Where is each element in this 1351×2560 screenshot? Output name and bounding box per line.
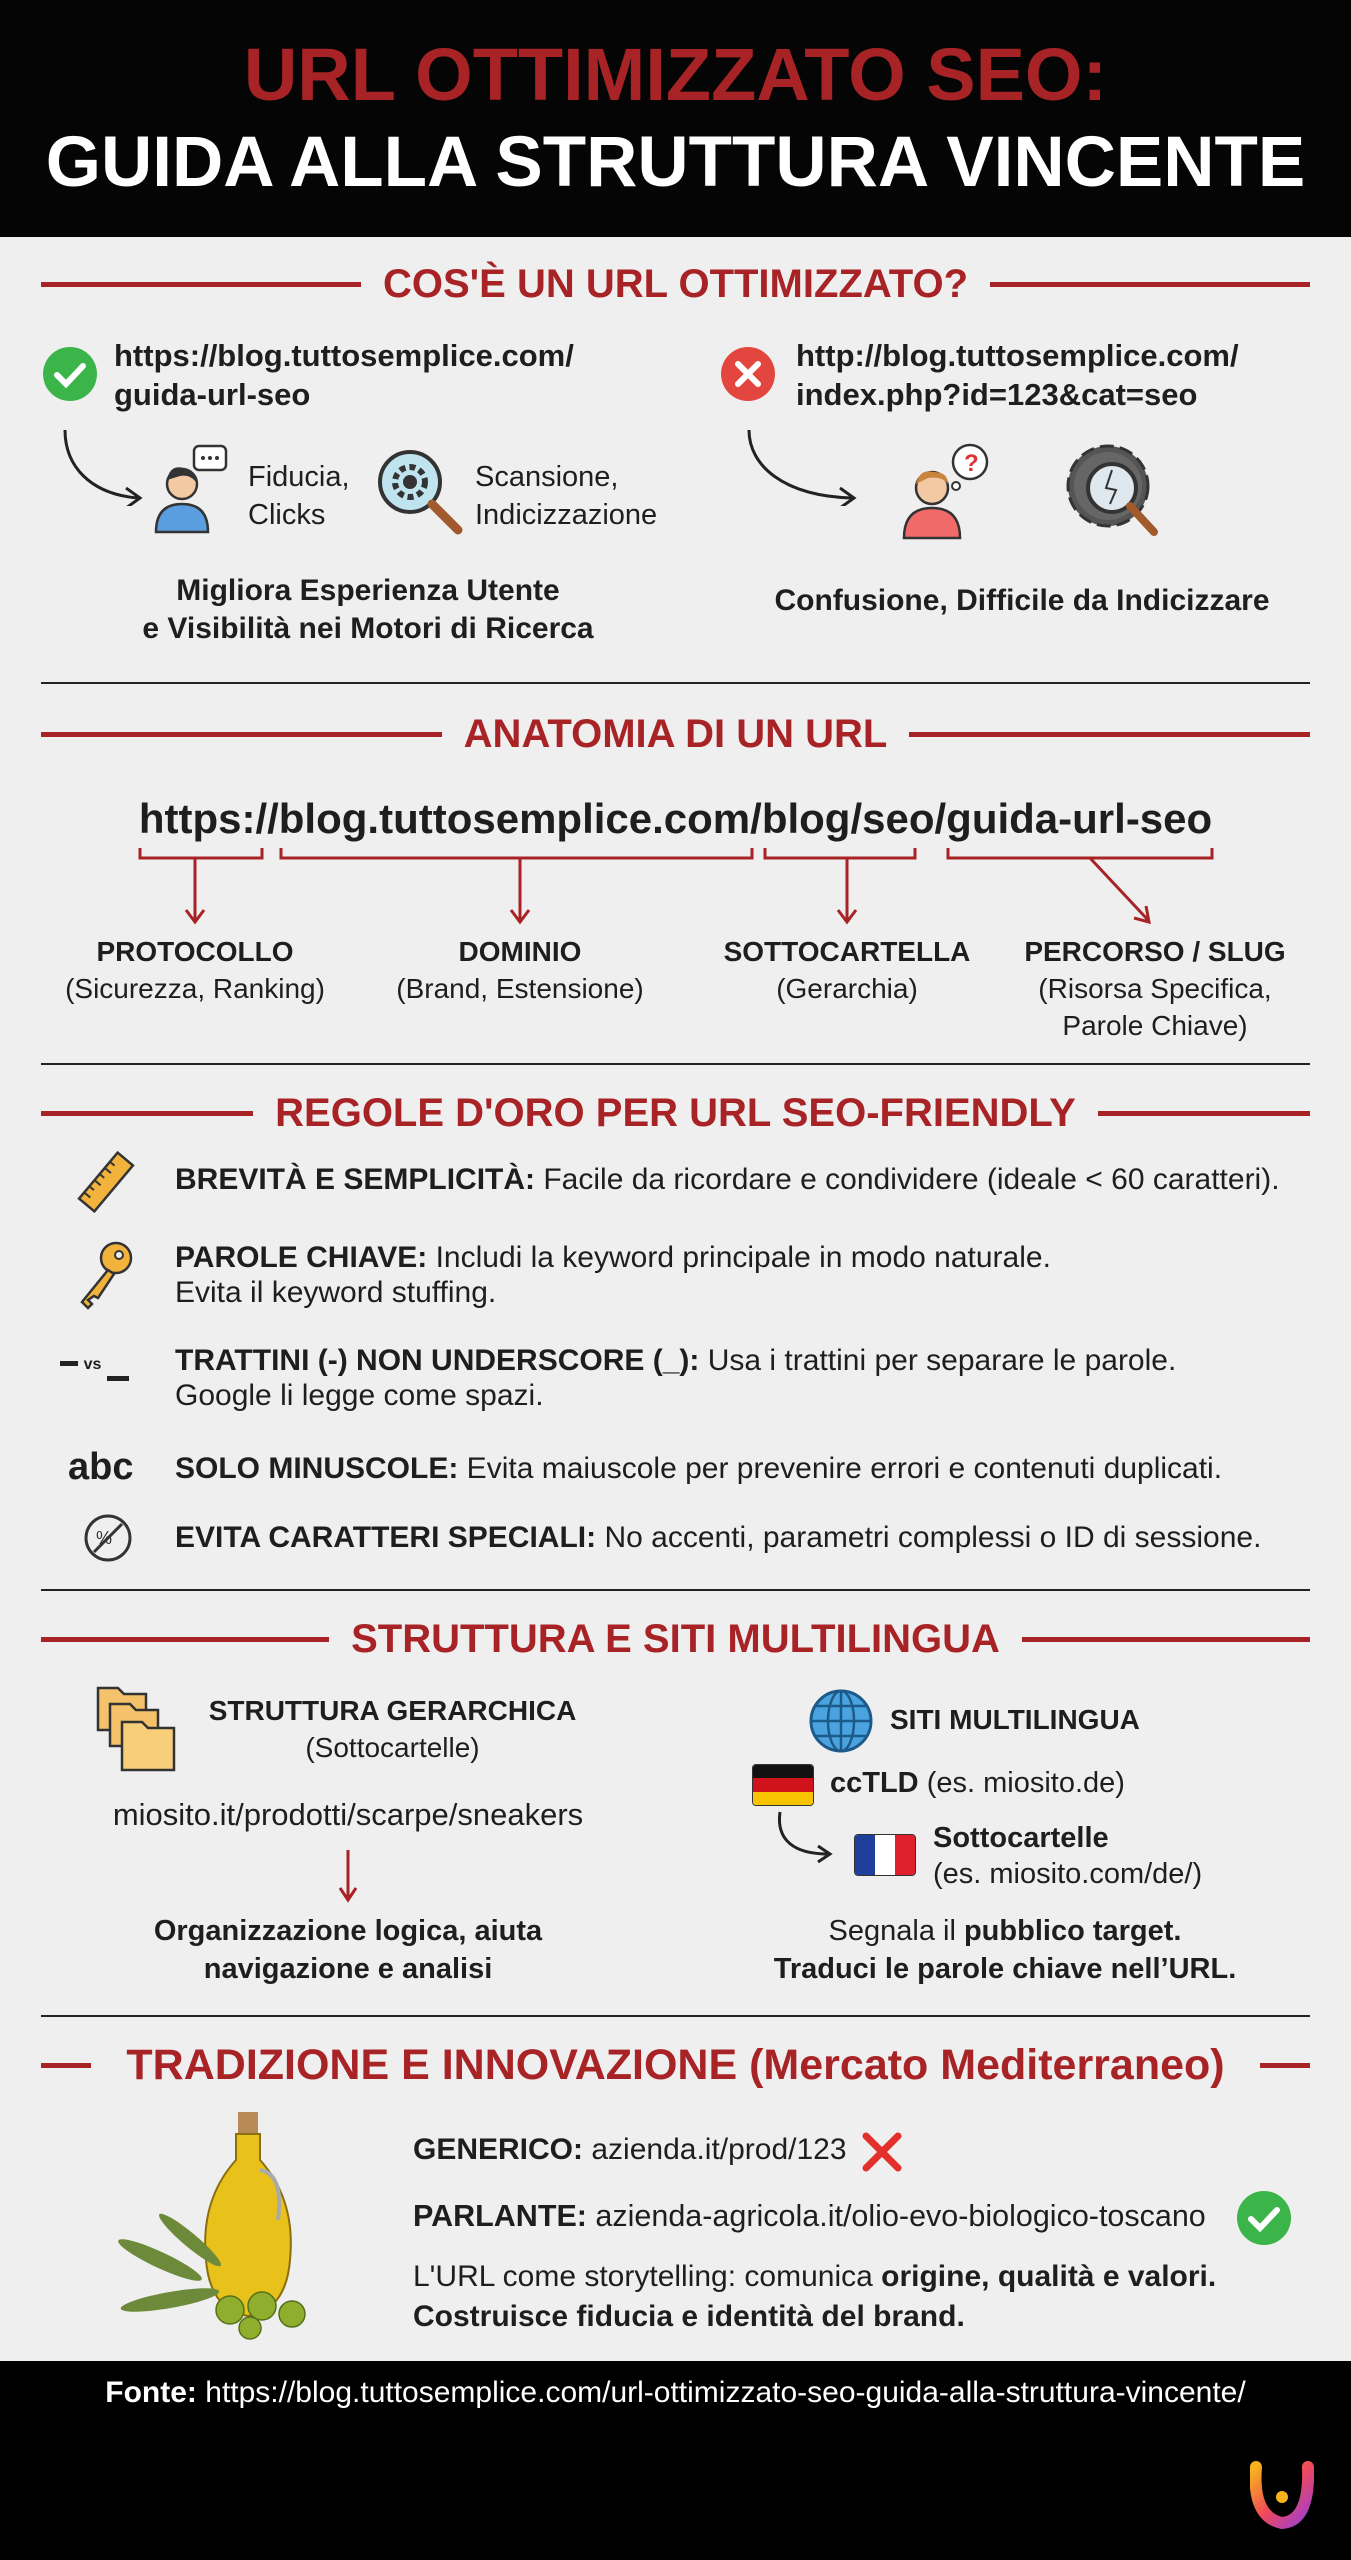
rule: trattini: TRATTINI (-) NON UNDERSCORE (_): Usa i trattini per separare le parole. — [175, 1344, 1176, 1377]
text: sottocartelle: Sottocartelle — [933, 1822, 1109, 1854]
label: sottocartella: (Gerarchia) — [776, 973, 918, 1004]
panel: siti multilingua — [752, 1690, 1236, 1985]
title line 2: GUIDA ALLA STRUTTURA VINCENTE — [46, 123, 1305, 202]
caption good: e Visibilità nei Motori di Ricerca — [142, 612, 594, 645]
label: sottocartella: SOTTOCARTELLA — [724, 936, 970, 967]
rule: parole chiave: Evita il keyword stuffing. — [175, 1276, 496, 1309]
icon: confused user: ? — [964, 450, 979, 477]
rule: brevita: BREVITÀ E SEMPLICITÀ: Facile da ricordare e condividere (ideale < 60 caratteri). — [175, 1163, 1280, 1196]
footer — [0, 2361, 1351, 2560]
text: struttura gerarchica: (Sottocartelle) — [305, 1732, 480, 1763]
icon: no special chars — [84, 1514, 132, 1562]
source text: Fonte: https://blog.tuttosemplice.com/url-ottimizzato-seo-guida-alla-struttura-vincente/ — [105, 2376, 1246, 2409]
arrow curve — [64, 430, 142, 506]
heading: cos'è un url ottimizzato: COS'È UN URL OTTIMIZZATO? — [383, 262, 968, 306]
bad url text — [796, 338, 1239, 412]
arrow curve — [748, 430, 856, 506]
flag: germany — [752, 1764, 814, 1806]
anatomy url: https://blog.tuttosemplice.com/blog/seo/guida-url-seo — [139, 795, 1212, 842]
rule: parole chiave — [175, 1241, 1051, 1309]
panel: struttura gerarchica — [96, 1686, 583, 1985]
caption: navigazione e analisi — [204, 1953, 492, 1985]
caption: Organizzazione logica, aiuta — [154, 1915, 542, 1947]
example url: miosito.it/prodotti/scarpe/sneakers — [113, 1797, 583, 1832]
bad url text: http://blog.tuttosemplice.com/ — [796, 338, 1239, 373]
icon: dash vs underscore: vs — [84, 1356, 101, 1373]
text: fiducia clicks — [248, 461, 350, 531]
heading: struttura multilingua: STRUTTURA E SITI MULTILINGUA — [351, 1616, 1000, 1660]
bad url text: index.php?id=123&cat=seo — [796, 377, 1197, 412]
text: siti multilingua: SITI MULTILINGUA — [890, 1704, 1140, 1735]
icon: red x — [721, 347, 775, 401]
icon: dash vs underscore — [60, 1356, 129, 1381]
text: struttura gerarchica: STRUTTURA GERARCHICA — [209, 1695, 576, 1726]
heading: regole d'oro — [41, 1090, 1310, 1134]
icon: folders — [96, 1686, 176, 1772]
label: sottocartella — [724, 936, 970, 1004]
heading: anatomia: ANATOMIA DI UN URL — [464, 712, 887, 756]
label: slug: (Risorsa Specifica, — [1038, 973, 1272, 1004]
text: storytelling: Costruisce fiducia e identità del brand. — [413, 2300, 965, 2333]
icon: abc: abc — [68, 1446, 133, 1488]
good url text: guida-url-seo — [114, 377, 310, 412]
icon: user with bubble — [154, 444, 228, 534]
heading: anatomia — [41, 712, 1310, 756]
arrow down — [338, 1850, 358, 1903]
icon: ruler — [77, 1150, 135, 1213]
label: slug — [1024, 936, 1286, 1041]
icon: red x mark — [860, 2130, 904, 2174]
rule: parole chiave: PAROLE CHIAVE: Includi la keyword principale in modo naturale. — [175, 1241, 1051, 1274]
text: fiducia clicks: Clicks — [248, 499, 325, 531]
label: slug: PERCORSO / SLUG — [1024, 936, 1286, 967]
icon: olive oil bottle — [100, 2110, 360, 2340]
icon: globe — [808, 1688, 874, 1754]
label: protocollo: PROTOCOLLO — [96, 936, 294, 967]
label: protocollo — [65, 936, 325, 1004]
icon: no special chars: % — [96, 1528, 112, 1548]
arrow curve — [774, 1810, 838, 1866]
panel: bad url — [721, 338, 1270, 617]
label: dominio: DOMINIO — [459, 936, 581, 967]
caption bad: Confusione, Difficile da Indicizzare — [774, 584, 1270, 617]
text: generico: GENERICO: azienda.it/prod/123 — [413, 2133, 847, 2166]
rule: trattini: Google li legge come spazi. — [175, 1379, 544, 1412]
text: storytelling: L'URL come storytelling: comunica origine, qualità e valori. — [413, 2260, 1216, 2293]
brackets and arrows — [138, 848, 1214, 924]
caption good: Migliora Esperienza Utente — [176, 574, 560, 607]
caption: Traduci le parole chiave nell’URL. — [774, 1953, 1236, 1985]
good url text: https://blog.tuttosemplice.com/ — [114, 338, 574, 373]
rule: caratteri speciali: EVITA CARATTERI SPECIALI: No accenti, parametri complessi o ID di sessione. — [175, 1521, 1261, 1554]
icon: logo — [1250, 2461, 1314, 2529]
title line 1: URL OTTIMIZZATO SEO: — [244, 33, 1107, 116]
rule: minuscole: SOLO MINUSCOLE: Evita maiuscole per prevenire errori e contenuti duplicati. — [175, 1452, 1222, 1485]
icon: green check — [43, 347, 97, 401]
good url text — [114, 338, 574, 412]
label: dominio: (Brand, Estensione) — [396, 973, 644, 1004]
text: scansione — [475, 461, 657, 531]
caption: Segnala il pubblico target. — [829, 1915, 1181, 1947]
text: storytelling — [413, 2257, 1216, 2337]
heading: regole d'oro: REGOLE D'ORO PER URL SEO-FRIENDLY — [275, 1090, 1076, 1134]
url anatomy diagram — [65, 795, 1286, 1041]
caption good — [142, 574, 594, 645]
label: slug: Parole Chiave) — [1062, 1010, 1248, 1041]
caption — [154, 1915, 542, 1985]
text: sottocartelle: (es. miosito.com/de/) — [933, 1858, 1202, 1890]
icon: confused user — [902, 444, 988, 540]
icon: key — [80, 1242, 132, 1310]
flag: france — [854, 1834, 916, 1876]
heading: cos'è un url ottimizzato — [41, 262, 1310, 306]
text: struttura gerarchica — [209, 1695, 576, 1763]
header banner — [0, 0, 1351, 237]
rule: trattini — [175, 1344, 1176, 1412]
heading: tradizione e innovazione: TRADIZIONE E INNOVAZIONE (Mercato Mediterraneo) — [126, 2040, 1225, 2088]
icon: green check — [1236, 2190, 1292, 2246]
text: cctld: ccTLD (es. miosito.de) — [830, 1767, 1125, 1799]
text: scansione: Indicizzazione — [475, 499, 657, 531]
heading: struttura multilingua — [41, 1616, 1310, 1660]
text: parlante: PARLANTE: azienda-agricola.it/olio-evo-biologico-toscano — [413, 2199, 1206, 2233]
panel: good url — [43, 338, 657, 645]
icon: magnifier gear — [378, 450, 462, 534]
caption — [720, 1912, 1290, 1988]
label: protocollo: (Sicurezza, Ranking) — [65, 973, 325, 1004]
text: scansione: Scansione, — [475, 461, 618, 493]
label: dominio — [396, 936, 644, 1004]
text: fiducia clicks: Fiducia, — [248, 461, 350, 493]
text: sottocartelle — [933, 1820, 1202, 1892]
icon: broken gear magnifier — [1066, 444, 1158, 536]
